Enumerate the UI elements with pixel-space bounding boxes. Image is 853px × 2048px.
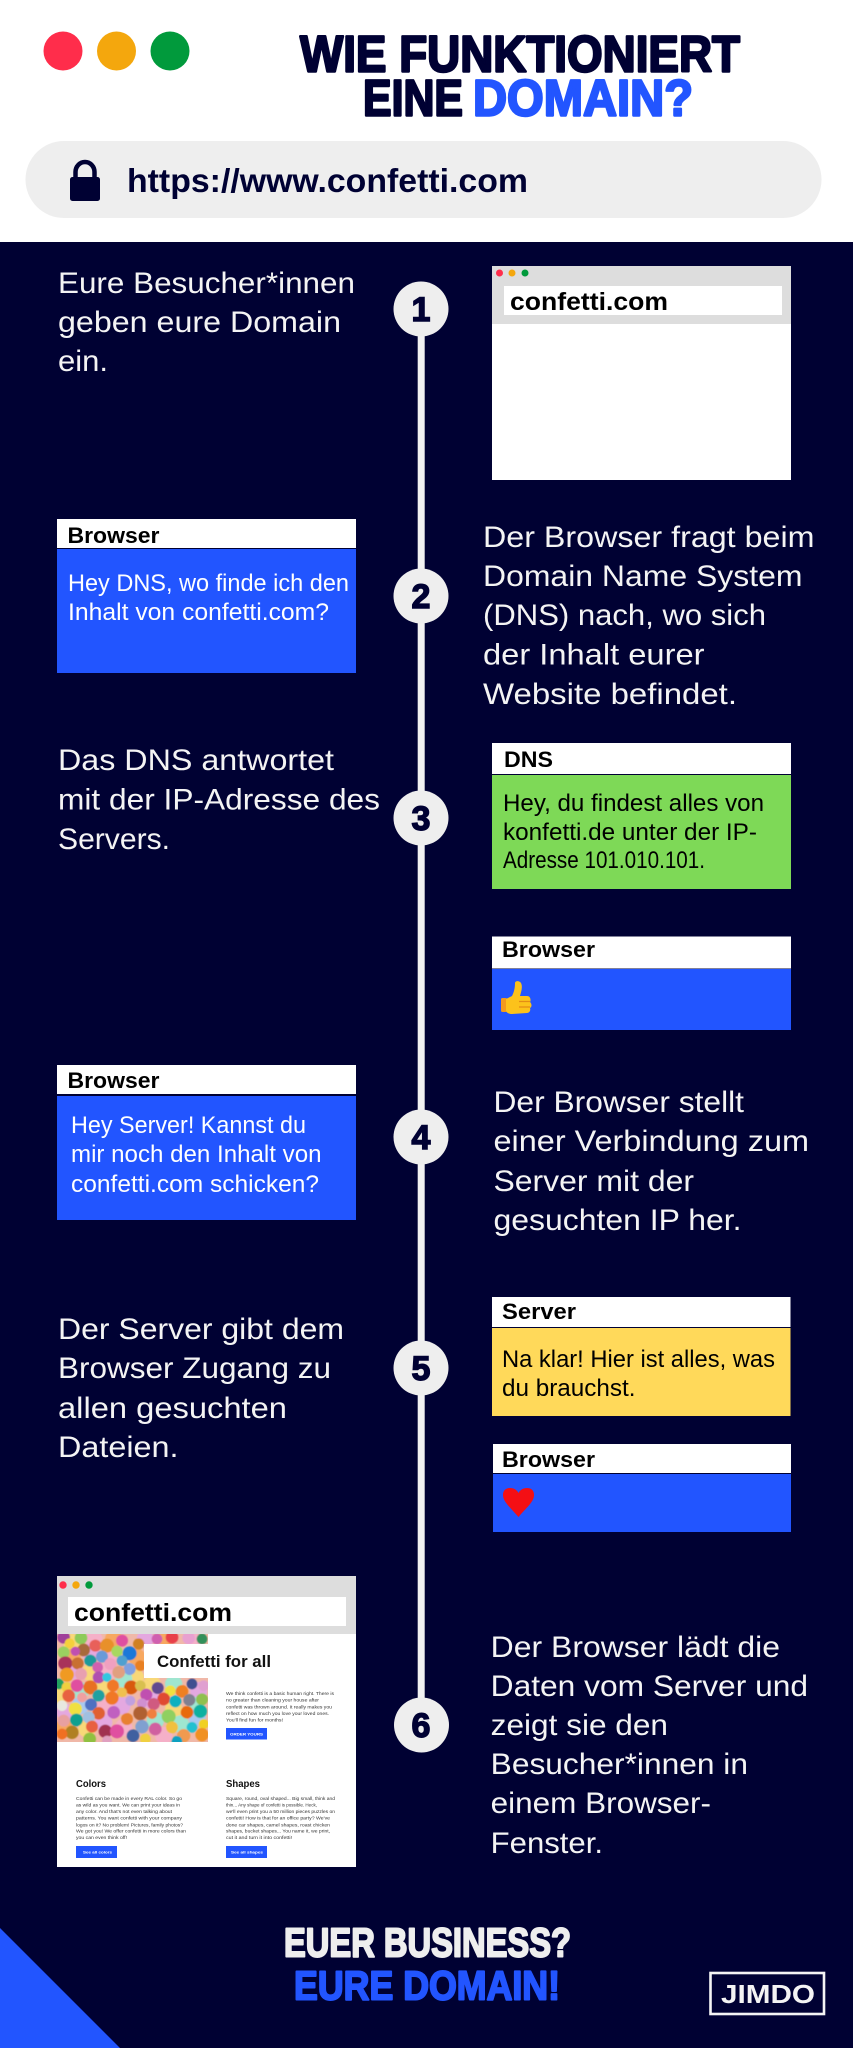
column: colors: any color. And that's not even talking about: [76, 1809, 173, 1814]
step 4 text: einer Verbindung zum: [494, 1125, 809, 1158]
step 5 number: 5: [412, 1350, 430, 1388]
hero paragraph: confetti was thrown around. It really makes you: [226, 1704, 332, 1709]
title: [300, 26, 740, 126]
step 5 number: [394, 1340, 448, 1396]
step 4 chat: browser: [57, 1065, 356, 1220]
browser window: confetti.com empty: [492, 266, 791, 480]
step 2 text: Domain Name System: [483, 560, 802, 593]
step 2 chat: browser: Inhalt von confetti.com?: [68, 599, 329, 626]
step 3 text: Das DNS antwortet: [58, 744, 335, 777]
hero paragraph: reflect on how much you love your loved ones.: [226, 1711, 329, 1716]
step 5 chat: browser heart: [493, 1444, 791, 1532]
column: colors: you can even think off!: [76, 1835, 127, 1840]
logo: Jimdo: JIMDO: [721, 1979, 815, 2009]
step 6 number: 6: [412, 1707, 430, 1745]
title: WIE FUNKTIONIERT: [300, 26, 740, 82]
hero heading: Confetti for all: [157, 1652, 271, 1671]
column: colors: Colors: [76, 1778, 106, 1790]
step 1 text: ein.: [58, 345, 108, 378]
hero paragraph: You'll find fun for months!: [226, 1718, 283, 1723]
column: shapes: confetti! How is that for an office party? We've: [226, 1816, 330, 1821]
step 3 text: [58, 744, 380, 856]
step 4 number: 4: [412, 1119, 431, 1157]
step 6 text: Besucher*innen in: [491, 1748, 748, 1781]
step 2 text: der Inhalt eurer: [483, 638, 705, 672]
column: shapes: done car shapes, camel shapes, roast chicken: [226, 1822, 330, 1827]
column: shapes: Square, round, oval shaped... Big small, think and: [226, 1796, 335, 1801]
step 2 text: (DNS) nach, wo sich: [483, 599, 766, 632]
step 6 text: zeigt sie den: [491, 1709, 668, 1742]
title: EINE: [363, 70, 463, 126]
step 6 text: [491, 1631, 808, 1860]
step 5 chat: server: Na klar! Hier ist alles, was: [502, 1346, 775, 1373]
step 5 chat: browser heart: Browser: [502, 1447, 595, 1472]
step 4 text: gesuchten IP her.: [494, 1204, 742, 1237]
closing slogan: EUER BUSINESS?: [284, 1920, 571, 1966]
column: shapes: shapes, bucket shapes... You name it, we print,: [226, 1829, 330, 1834]
step 3 number: 3: [412, 800, 430, 838]
column: colors: Confetti can be made in every RAL color. So go: [76, 1796, 182, 1801]
step 5 text: allen gesuchten: [58, 1392, 287, 1425]
step 3 chat: DNS: konfetti.de unter der IP-: [503, 819, 757, 846]
step 6 text: Daten vom Server und: [491, 1670, 808, 1703]
step 1 number: [394, 282, 448, 336]
step 2 text: Der Browser fragt beim: [483, 521, 814, 554]
browser window: confetti.com empty: confetti.com: [510, 288, 668, 316]
step 3 number: [394, 790, 448, 846]
step 3 chat: DNS: [492, 743, 791, 889]
step 2 chat: browser: [57, 519, 356, 673]
step 6 number: [394, 1698, 449, 1752]
column: colors: [76, 1778, 186, 1858]
step 3 chat: browser thumbs up: [492, 936, 791, 1030]
icon: thumbs up: [501, 981, 532, 1014]
column: shapes: we'll even print you a 50 million pieces puzzles on: [226, 1809, 335, 1814]
step 3 text: mit der IP-Adresse des: [58, 784, 380, 816]
step 2 text: Website befindet.: [483, 678, 737, 711]
step 3 chat: DNS: Hey, du findest alles von: [503, 790, 764, 817]
step 5 chat: server: [492, 1297, 790, 1416]
url text: https://www.confetti.com: [127, 162, 528, 199]
column: colors: We got you! We offer confetti in more colors than: [76, 1829, 186, 1834]
step 2 chat: browser: Hey DNS, wo finde ich den: [68, 570, 349, 597]
column: shapes: thin... Any shape of confetti is possible. Heck,: [226, 1802, 317, 1808]
logo: Jimdo: [710, 1973, 824, 2014]
icon: heart: [503, 1488, 534, 1517]
step 2 number: [394, 568, 448, 624]
column: colors: logos on it? No problem! Pictures, family photos?: [76, 1822, 183, 1827]
column: shapes: Shapes: [226, 1778, 260, 1790]
step 4 chat: browser: Browser: [68, 1068, 160, 1093]
column: shapes: cut it and turn it into confetti!: [226, 1835, 292, 1840]
step 1 text: geben eure Domain: [58, 306, 341, 339]
corner triangle: [0, 1928, 120, 2048]
step 3 chat: DNS: DNS: [504, 747, 553, 772]
hero paragraph: We think confetti is a basic human right. There is: [226, 1691, 335, 1696]
column: colors: See all colors: [83, 1850, 113, 1855]
step 5 text: Der Server gibt dem: [58, 1313, 344, 1346]
step 4 chat: browser: mir noch den Inhalt von: [71, 1141, 322, 1168]
closing slogan: EURE DOMAIN!: [294, 1962, 560, 2008]
step 4 text: Server mit der: [494, 1165, 694, 1198]
step 1 number: 1: [412, 291, 430, 329]
timeline line: [418, 309, 425, 1725]
hero paragraph: [226, 1691, 335, 1723]
column: colors: as wild as you want. We can print your ideas in: [76, 1802, 180, 1808]
confetti photo: [57, 1634, 208, 1742]
step 3 text: Servers.: [58, 823, 170, 856]
step 5 text: Dateien.: [58, 1431, 178, 1464]
step 4 chat: browser: Hey Server! Kannst du: [71, 1112, 306, 1139]
step 5 chat: server: du brauchst.: [502, 1375, 636, 1402]
closing slogan: [284, 1920, 571, 2008]
button: order yours: [226, 1728, 267, 1740]
step 4 text: Der Browser stellt: [494, 1086, 745, 1119]
step 4 text: [494, 1086, 809, 1237]
step 6 text: Der Browser lädt die: [491, 1631, 780, 1664]
address bar: [26, 141, 822, 218]
step 6 text: einem Browser-: [491, 1787, 711, 1820]
step 4 chat: browser: confetti.com schicken?: [71, 1171, 319, 1198]
step 5 text: [58, 1313, 344, 1464]
step 2 text: [483, 521, 814, 711]
step 2 number: 2: [412, 578, 430, 616]
column: shapes: See all shapes: [231, 1850, 264, 1855]
hero paragraph: no greater than cleaning your house after: [226, 1698, 320, 1703]
step 4 number: [394, 1110, 448, 1164]
step 1 text: Eure Besucher*innen: [58, 267, 355, 300]
browser window: confetti website: confetti.com: [74, 1599, 232, 1627]
window control dots: [44, 32, 190, 70]
title: DOMAIN?: [473, 70, 693, 126]
button: order yours: ORDER YOURS: [230, 1732, 263, 1736]
step 1 text: [58, 267, 355, 378]
browser window: confetti website: [52, 1576, 356, 1867]
step 5 text: Browser Zugang zu: [58, 1352, 331, 1385]
column: shapes: [226, 1778, 335, 1858]
column: colors: patterns. You want confetti with your company: [76, 1816, 183, 1821]
icon: padlock: [70, 162, 100, 201]
step 2 chat: browser: Browser: [68, 523, 160, 548]
step 6 text: Fenster.: [491, 1827, 603, 1860]
step 3 chat: browser thumbs up: Browser: [502, 937, 595, 962]
step 5 chat: server: Server: [502, 1299, 576, 1324]
step 3 chat: DNS: Adresse 101.010.101.: [503, 847, 705, 874]
hero heading: [144, 1644, 356, 1678]
